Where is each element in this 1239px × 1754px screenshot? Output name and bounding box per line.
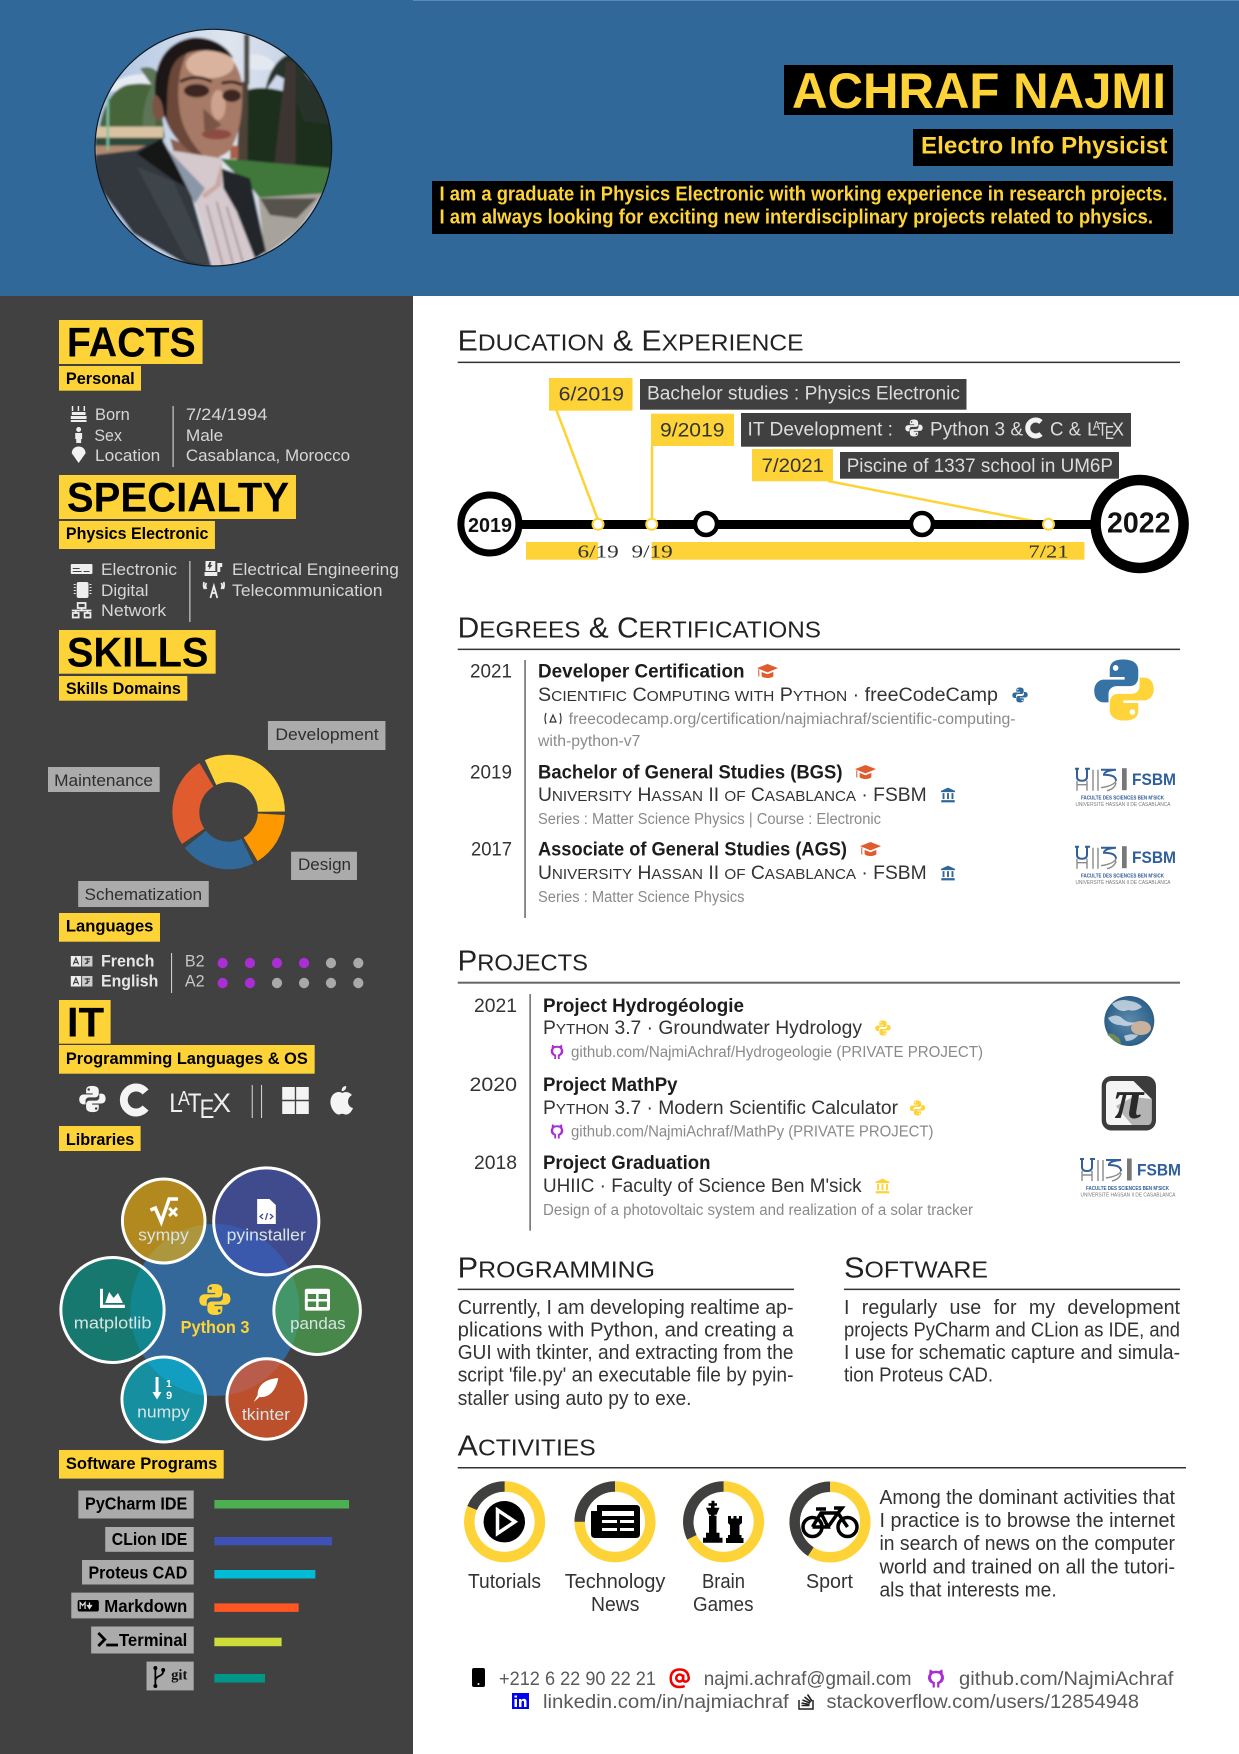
text: software paragraph: [844, 1297, 1180, 1387]
personal labels: [94, 405, 160, 465]
logo: FSBM: FSBM: [1132, 770, 1176, 789]
bubble: matplotlib: matplotlib: [74, 1313, 151, 1332]
milestone: 9/2019: C &: [1050, 419, 1081, 440]
skill bar: Terminal: [91, 1626, 282, 1654]
entry: associate: Series : Matter Science Physics: [538, 889, 745, 906]
entry: developer certification: with-python-v7: [537, 733, 640, 750]
nodes: milestone dots: [592, 519, 1054, 530]
milestone: 9/2019: 9/2019: [660, 421, 724, 442]
project: hydrogeology: PYTHON 3.7 · Groundwater Hydrology: [543, 1018, 862, 1039]
LaTeX logo: T: [188, 1088, 202, 1118]
bubble chart: python libraries: [61, 1168, 360, 1442]
activity: brain games: Games: [693, 1594, 754, 1616]
project: mathpy: [470, 1075, 934, 1141]
milestone: 7/2021: 7/2021: [762, 456, 824, 477]
panel: contact: [472, 1668, 1174, 1713]
heading: software: SOFTWARE: [844, 1252, 988, 1284]
subheading: programming languages: [59, 1045, 315, 1074]
bio: I am a graduate in Physics Electronic with working experience in research projects.: [440, 184, 1168, 206]
label: design: Design: [298, 855, 351, 874]
heading: activities: ACTIVITIES: [458, 1430, 596, 1462]
subheading: software programs: Software Programs: [66, 1454, 217, 1473]
icon: electronic device: [71, 564, 92, 574]
entry: developer certification: [470, 662, 1028, 750]
icon: electrical engineering: [205, 561, 222, 576]
project: mathpy: github.com/NajmiAchraf/MathPy (PRIVATE PROJECT): [571, 1124, 934, 1141]
project: graduation: Project Graduation: [543, 1153, 710, 1174]
specialty list left: [101, 560, 177, 620]
activity: technology news: Technology: [565, 1571, 665, 1593]
skill bar: CLion: [105, 1527, 332, 1552]
label: design: [291, 852, 357, 880]
entry: bachelor: 2019: [470, 763, 512, 784]
bubble: pandas: [274, 1266, 360, 1354]
personal values: [186, 405, 350, 465]
activity: tutorials: Tutorials: [468, 1571, 541, 1593]
contact: linkedin: linkedin.com/in/najmiachraf: [543, 1691, 789, 1713]
milestone: 9/2019: X: [1112, 419, 1124, 439]
activity: tutorials: [458, 1476, 551, 1593]
contact: stack overflow: stackoverflow.com/users/12854948: [826, 1691, 1139, 1713]
subheading: personal: [59, 366, 141, 391]
project: hydrogeology: github.com/NajmiAchraf/Hydrogeologie (PRIVATE PROJECT): [571, 1044, 983, 1061]
label: schematization: Schematization: [85, 885, 202, 904]
LaTeX logo: [169, 1088, 231, 1124]
specialty list right: Telecommunication: [232, 581, 383, 600]
entry: associate: Associate of General Studies (AGS): [538, 840, 847, 861]
panel: specialty: [59, 473, 399, 622]
subheading: languages: Languages: [66, 917, 153, 936]
entry: bachelor: [470, 763, 955, 828]
panel: skills: [48, 628, 385, 993]
activity: technology news: [565, 1486, 665, 1616]
label: schematization: [78, 881, 209, 907]
text: software paragraph: I use for schematic capture and simula-: [844, 1342, 1180, 1364]
bubble: pyinstaller: [214, 1168, 319, 1275]
skill bar: git: [147, 1662, 265, 1690]
project: hydrogeology: 2021: [474, 996, 517, 1017]
date band: 9/19: [632, 541, 673, 561]
milestone: 9/2019: Python 3 &: [930, 419, 1023, 440]
activity: brain games: Brain: [702, 1571, 745, 1593]
timeline: [461, 378, 1184, 568]
date band: [526, 541, 1084, 561]
text: activities paragraph: in search of news on the computer: [880, 1533, 1175, 1555]
text: activities paragraph: [879, 1487, 1175, 1601]
job title: Electro Info Physicist: [921, 133, 1168, 160]
bubble: matplotlib: [61, 1258, 164, 1362]
heading: IT: IT: [67, 998, 104, 1046]
icon: cake: [71, 406, 87, 422]
language rows: A2: [185, 972, 205, 991]
portrait photo: [90, 25, 340, 270]
activity: sport: [781, 1473, 879, 1593]
heading: programming: PROGRAMMING: [458, 1252, 655, 1284]
icon: linkedin: [512, 1693, 529, 1709]
skill bar: Terminal: Terminal: [119, 1630, 187, 1650]
python core: Python 3: [181, 1317, 250, 1337]
python core: [130, 1224, 299, 1396]
milestone: 9/2019: [651, 413, 1131, 447]
personal values: Casablanca, Morocco: [186, 446, 350, 465]
text: activities paragraph: als that interests me.: [880, 1579, 1057, 1601]
icon: stack overflow: [799, 1694, 813, 1709]
personal values: Male: [186, 426, 223, 445]
icon: pi calculator: [1102, 1069, 1156, 1131]
node: 2019: [461, 495, 519, 553]
milestone: 9/2019: T: [1098, 419, 1107, 439]
entry: bachelor: Bachelor of General Studies (BGS): [538, 763, 842, 784]
milestone: 6/2019: 6/2019: [559, 385, 624, 406]
subheading: languages: [59, 913, 160, 942]
bio: I am always looking for exciting new interdisciplinary projects related to physics.: [440, 206, 1153, 228]
personal labels: Location: [95, 446, 160, 465]
heading: facts: FACTS: [67, 318, 196, 366]
timeline axis: [522, 520, 1094, 529]
panel: software: [844, 1252, 1180, 1387]
LaTeX logo: A: [178, 1088, 190, 1110]
rating dots: english: [218, 978, 363, 988]
bubble: tkinter: tkinter: [242, 1405, 290, 1424]
icon: C: [124, 1088, 146, 1112]
panel: facts: [59, 318, 350, 467]
skill bar: Proteus: Proteus CAD: [88, 1562, 187, 1582]
text: activities paragraph: I practice is to browse the internet: [880, 1510, 1175, 1532]
subheading: personal: Personal: [66, 369, 135, 388]
panel: degrees and certifications: [458, 612, 1180, 918]
milestone: 7/2021: [752, 449, 1119, 481]
personal labels: Born: [95, 405, 130, 424]
panel: activities: [458, 1430, 1186, 1616]
entry: developer certification: SCIENTIFIC COMPUTING WITH PYTHON · freeCodeCamp: [538, 685, 998, 706]
logo: FSBM: [1080, 1158, 1181, 1198]
bubble: pandas: pandas: [290, 1314, 346, 1333]
activity: technology news: News: [591, 1594, 639, 1616]
node: 2022: [1096, 480, 1184, 568]
bio: [432, 181, 1173, 234]
milestone: 9/2019: A: [1093, 418, 1100, 433]
name: ACHRAF NAJMI: [792, 63, 1166, 119]
project: mathpy: PYTHON 3.7 · Modern Scientific Calculator: [543, 1098, 899, 1119]
icon: windows: [282, 1087, 309, 1114]
activity: sport: Sport: [806, 1571, 853, 1593]
project: graduation: Design of a photovoltaic system and realization of a solar tracker: [543, 1202, 973, 1219]
logo: FSBM: FACULTE DES SCIENCES BEN M'SICK: [1086, 1186, 1169, 1192]
personal labels: Sex: [94, 426, 122, 445]
panel: header: [0, 0, 1239, 296]
entry: developer certification: 2021: [470, 662, 512, 683]
logo: FSBM: [1075, 846, 1176, 886]
milestone: 9/2019: E: [1105, 423, 1114, 443]
entry: associate: UNIVERSITY HASSAN II OF CASABLANCA · FSBM: [538, 863, 927, 884]
icon: english language: [71, 976, 92, 986]
skill bar: CLion: CLion IDE: [112, 1529, 187, 1549]
text: programming paragraph: script 'file.py' an executable file by pyin-: [458, 1365, 794, 1387]
skill bar: Markdown: [71, 1593, 299, 1618]
specialty list left: Network: [101, 601, 167, 620]
subheading: libraries: [59, 1126, 141, 1151]
project: graduation: [474, 1153, 973, 1219]
entry: developer certification: freecodecamp.org/certification/najmiachraf/scientific-computing-: [569, 711, 1016, 728]
logo: FSBM: [1075, 768, 1176, 808]
text: activities paragraph: world and trained on all the tutori-: [879, 1556, 1175, 1578]
entry: associate: 2017: [471, 840, 512, 861]
bubble: tkinter: [227, 1359, 306, 1439]
milestone: 6/2019: [549, 378, 966, 411]
text: programming paragraph: plications with Python, and creating a: [458, 1320, 794, 1342]
language rows: B2: [185, 952, 205, 971]
text: software paragraph: projects PyCharm and CLion as IDE, and: [844, 1320, 1180, 1342]
icon: phone: [472, 1668, 485, 1687]
activity: brain games: [676, 1475, 771, 1616]
entry: developer certification: Developer Certification: [538, 662, 744, 683]
skill bar: git: git: [171, 1668, 187, 1684]
panel: IT: [59, 998, 360, 1690]
project: graduation: 2018: [474, 1153, 517, 1174]
bubble: sympy: sympy: [138, 1225, 189, 1245]
entry: bachelor: Series : Matter Science Physics | Course : Electronic: [538, 811, 881, 828]
text: activities paragraph: Among the dominant activities that: [880, 1487, 1175, 1509]
LaTeX logo: X: [212, 1088, 231, 1118]
project: hydrogeology: Project Hydrogéologie: [543, 996, 744, 1017]
project: graduation: UHIIC · Faculty of Science Ben M'sick: [543, 1176, 862, 1197]
icon: python: [79, 1086, 106, 1112]
donut chart: skills domains: [169, 752, 288, 872]
skill bar: Proteus: [82, 1560, 315, 1584]
icon: network: [72, 603, 91, 618]
logo: FSBM: FACULTE DES SCIENCES BEN M'SICK: [1081, 796, 1164, 802]
milestone: 6/2019: Bachelor studies : Physics Electronic: [647, 383, 960, 404]
heading: skills: SKILLS: [67, 628, 208, 676]
logo: FSBM: UNIVERSITÉ HASSAN II DE CASABLANCA: [1076, 801, 1171, 808]
subheading: physics electronic: Physics Electronic: [66, 524, 208, 543]
logo: python: [1094, 659, 1154, 721]
milestone: 9/2019: L: [1087, 419, 1098, 439]
panel: projects: [458, 946, 1181, 1231]
icon: globe: [1104, 996, 1154, 1046]
label: maintenance: Maintenance: [54, 771, 153, 790]
contact: phone: +212 6 22 90 22 21: [499, 1668, 656, 1690]
icon: telecommunication antenna: [204, 582, 224, 598]
nodes: mid-year markers: [695, 513, 933, 535]
contact: email: najmi.achraf@gmail.com: [704, 1668, 912, 1690]
specialty list left: Electronic: [101, 560, 177, 579]
label: development: Development: [275, 725, 379, 744]
heading: projects: PROJECTS: [458, 946, 588, 978]
milestone: 9/2019: IT Development :: [748, 419, 893, 440]
logo: FSBM: FSBM: [1132, 848, 1176, 867]
language rows: [71, 952, 363, 993]
text: programming paragraph: GUI with tkinter, and extracting from the: [458, 1342, 794, 1364]
bubble: numpy: [122, 1357, 206, 1442]
specialty list right: [232, 560, 399, 600]
subheading: physics electronic: [59, 521, 215, 549]
icon: french language: [71, 956, 92, 966]
personal values: 7/24/1994: [186, 405, 267, 424]
icon: at sign: [671, 1670, 689, 1687]
milestone: 7/2021: Piscine of 1337 school in UM6P: [847, 456, 1113, 477]
bubble: numpy: numpy: [137, 1403, 190, 1422]
heading: degrees: DEGREES & CERTIFICATIONS: [458, 612, 821, 644]
icon: chip: [74, 582, 91, 598]
panel: education and experience: [458, 326, 1184, 568]
language rows: French: [101, 952, 154, 971]
bubble: numpy: 9: [166, 1390, 172, 1402]
rating dots: french: [218, 958, 363, 968]
icon: apple: [330, 1086, 353, 1115]
page background: sidebar: [0, 296, 413, 1754]
icon: pi calculator: π: [1114, 1069, 1145, 1131]
icon: github: [928, 1669, 944, 1688]
bubble: numpy: 1: [166, 1379, 172, 1390]
subheading: libraries: Libraries: [66, 1130, 134, 1149]
project: hydrogeology: [474, 996, 983, 1061]
node: 2019: 2019: [468, 515, 512, 537]
LaTeX logo: L: [169, 1088, 183, 1118]
node: 2022: 2022: [1107, 508, 1170, 540]
skill bar: PyCharm: PyCharm IDE: [85, 1493, 187, 1513]
logo: FSBM: UNIVERSITÉ HASSAN II DE CASABLANCA: [1076, 879, 1171, 886]
entry: bachelor: UNIVERSITY HASSAN II OF CASABLANCA · FSBM: [538, 785, 927, 806]
contact: github: github.com/NajmiAchraf: [959, 1668, 1174, 1690]
specialty list right: Electrical Engineering: [232, 560, 399, 579]
specialty list left: Digital: [101, 581, 148, 600]
connector lines: [556, 410, 1048, 524]
text: software paragraph: I regularly use for my development: [844, 1297, 1180, 1319]
subheading: programming languages: Programming Languages & OS: [66, 1049, 308, 1068]
skill bar: Markdown: Markdown: [104, 1596, 187, 1616]
subheading: skills domains: Skills Domains: [66, 679, 181, 698]
logo: FSBM: UNIVERSITÉ HASSAN II DE CASABLANCA: [1080, 1192, 1176, 1198]
text: programming paragraph: Currently, I am developing realtime ap-: [458, 1297, 794, 1319]
icon: person: [75, 427, 82, 443]
skill bar: PyCharm: [78, 1490, 349, 1518]
icon: location pin: [72, 446, 86, 463]
logo: FSBM: FACULTE DES SCIENCES BEN M'SICK: [1081, 874, 1164, 880]
panel: programming: [458, 1252, 794, 1410]
logo: FSBM: FSBM: [1137, 1160, 1181, 1180]
job title: [913, 129, 1173, 166]
text: software paragraph: tion Proteus CAD.: [844, 1365, 993, 1387]
bubble: pyinstaller: pyinstaller: [227, 1225, 306, 1245]
text: programming paragraph: staller using auto py to exe.: [458, 1388, 692, 1410]
bubble: sympy: [122, 1179, 205, 1263]
LaTeX logo: E: [200, 1094, 214, 1124]
heading: education: EDUCATION & EXPERIENCE: [458, 326, 804, 358]
entry: associate: [471, 840, 955, 906]
subheading: software programs: [59, 1450, 224, 1479]
date band: 7/21: [1028, 541, 1069, 561]
text: programming paragraph: [458, 1297, 794, 1410]
date band: 6/19: [578, 541, 619, 561]
language rows: English: [101, 972, 158, 991]
project: mathpy: 2020: [470, 1075, 517, 1096]
heading: specialty: SPECIALTY: [67, 473, 289, 521]
label: maintenance: [48, 767, 160, 792]
project: mathpy: Project MathPy: [543, 1075, 678, 1096]
label: development: [268, 721, 385, 750]
